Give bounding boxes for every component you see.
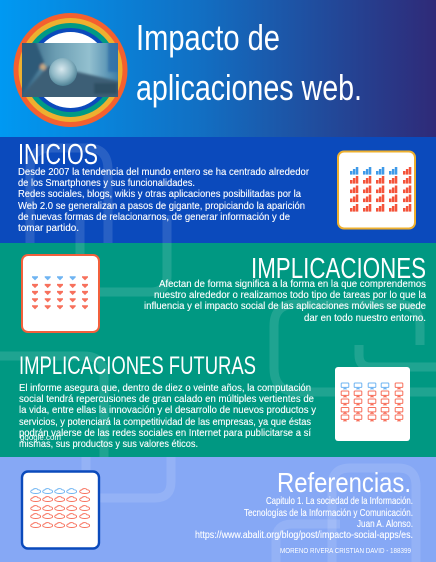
text block: implicaciones futuras: la vida, entre ellas la innovación y el desarrollo de nuevos productos y: [19, 405, 317, 416]
icon: signal bars grid: [338, 152, 415, 228]
text block: implicaciones futuras: [19, 383, 317, 450]
panel: implicaciones background: [0, 243, 436, 457]
panel: inicios background: [0, 137, 436, 243]
text block: inicios: Redes sociales, blogs, wikis y otras aplicaciones posibilitadas por la: [18, 189, 301, 200]
credit: author: MORENO RIVERA CRISTIAN DAVID - 188399: [280, 546, 411, 555]
text block: implicaciones futuras: podrán valerse de las redes sociales en Internet para publicitarse a sí: [19, 428, 311, 439]
text block: implicaciones futuras: mismas, sus productos y sus valores éticos.: [19, 439, 198, 450]
text block: referencias: [195, 496, 413, 541]
panel: referencias background: [0, 457, 436, 562]
heading: referencias: Referencias.: [277, 467, 411, 498]
title: Impacto de: [136, 17, 280, 58]
text block: inicios: tomar partido.: [18, 223, 79, 234]
text block: implicaciones futuras: social tendrá repercusiones de gran calado en múltiples vertientes de: [19, 394, 314, 405]
heading: inicios: INICIOS: [18, 139, 98, 171]
panel: header background: [0, 0, 436, 137]
text block: inicios: Web 2.0 se generalizan a pasos de gigante, propiciando la aparición: [18, 201, 305, 212]
text block: implicaciones futuras: servicios, y potenciará la competitividad de las empresas, ya que éstas: [19, 417, 311, 428]
icon: monitor grid: [335, 367, 410, 441]
text block: implicaciones futuras: El informe asegura que, dentro de diez o veinte años, la computación: [19, 383, 311, 394]
text block: inicios: de los Smartphones y sus funcionalidades.: [18, 178, 195, 189]
title: [136, 17, 362, 108]
caption: google.com: google.com: [20, 433, 61, 442]
heading: implicaciones futuras: IMPLICACIONES FUTURAS: [19, 352, 256, 380]
text block: implicaciones: [144, 279, 426, 324]
text block: implicaciones: dar en todo nuestro entorno.: [304, 313, 426, 324]
text block: inicios: Desde 2007 la tendencia del mundo entero se ha centrado alrededor: [18, 167, 309, 178]
title: aplicaciones web.: [136, 67, 362, 108]
icon: cloud grid: [22, 472, 99, 548]
text block: referencias: Juan A. Alonso.: [357, 519, 413, 530]
icon: rainbow circle with photo: [14, 13, 128, 127]
text block: inicios: [18, 167, 309, 234]
icon: wifi grid: [22, 255, 99, 332]
text block: inicios: de nuevas formas de relacionarnos, de generar información y de: [18, 212, 290, 223]
